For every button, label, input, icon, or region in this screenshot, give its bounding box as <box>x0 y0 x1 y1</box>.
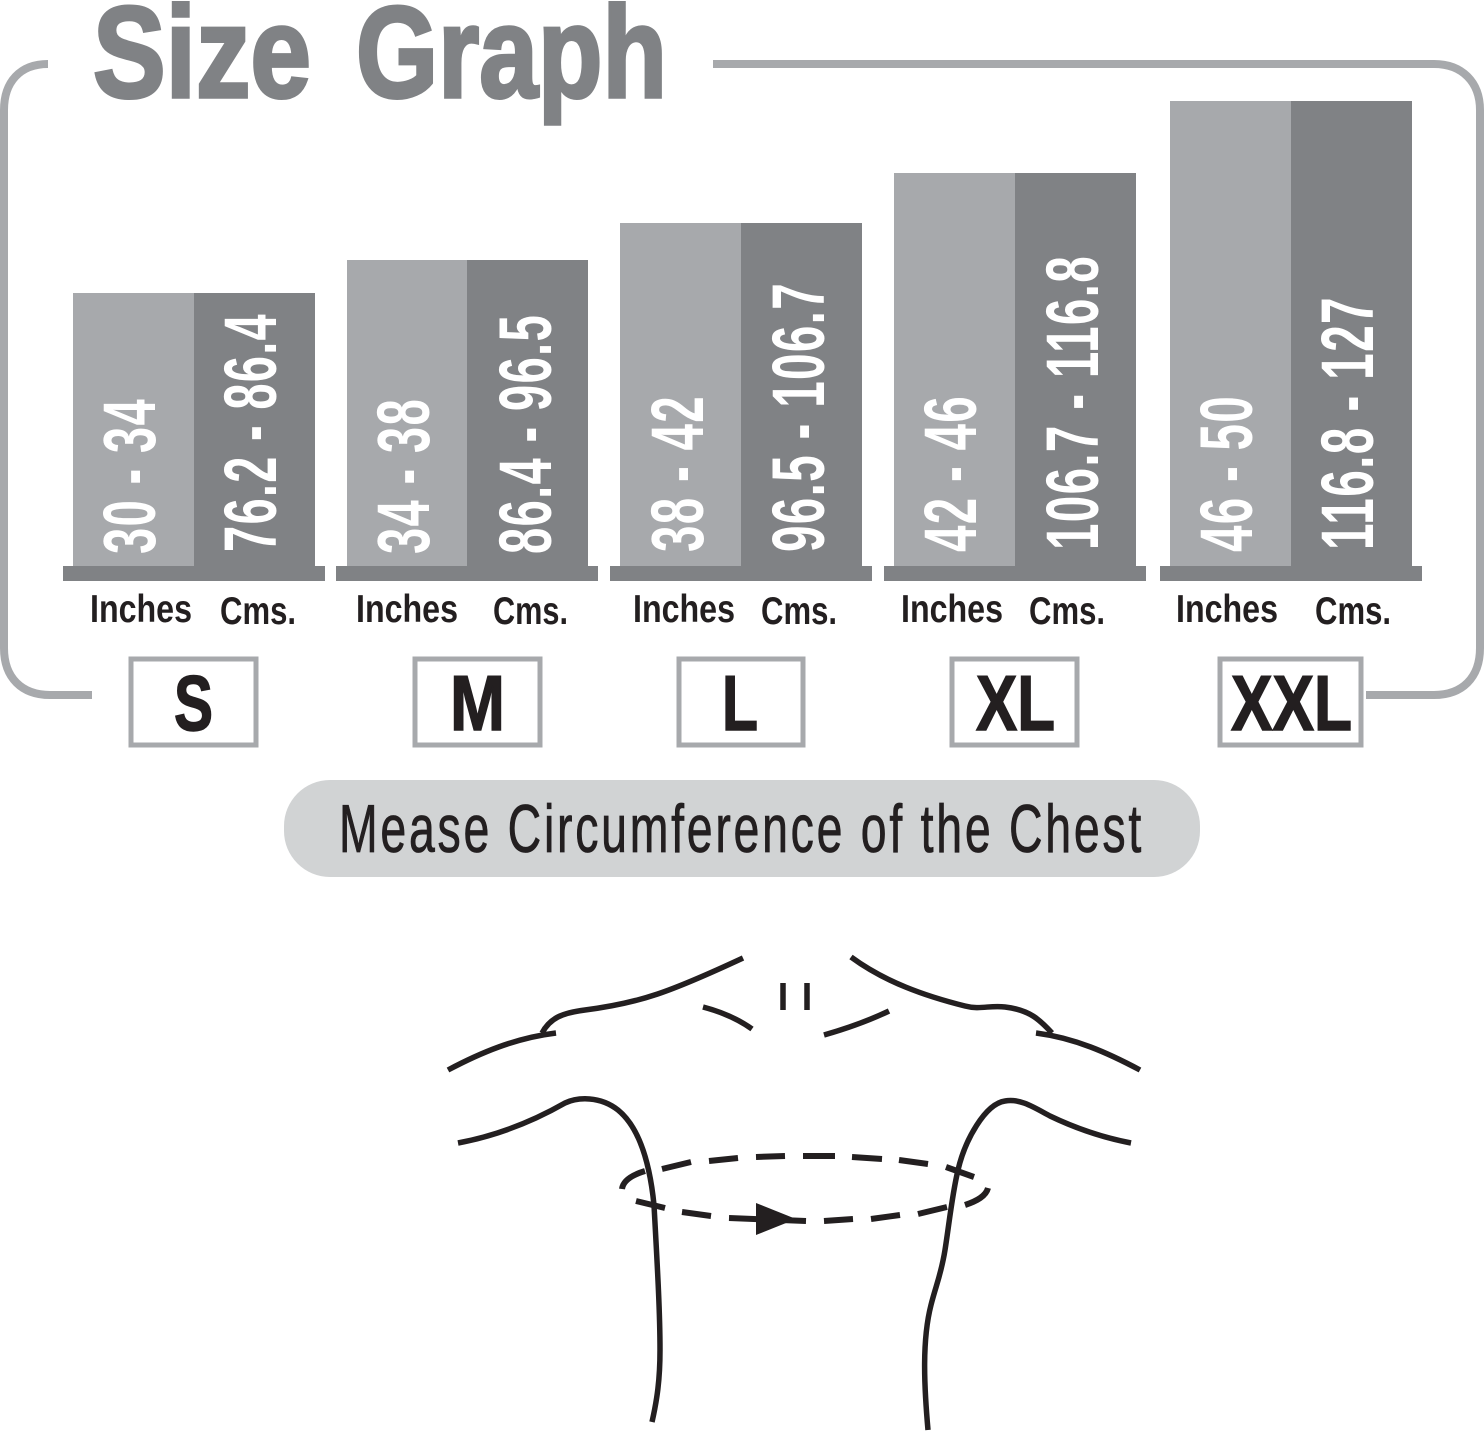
instruction pill <box>284 780 1200 877</box>
bar group: XL <box>884 173 1146 633</box>
bar group: XL: Cms. <box>1029 590 1105 633</box>
bar group: XXL: Cms. <box>1315 590 1391 633</box>
size label: XL: XL <box>976 659 1055 747</box>
rounded frame <box>4 64 1480 695</box>
dashed measuring loop <box>622 1156 988 1221</box>
bar group: S: Inches <box>90 588 192 631</box>
size label: L <box>679 659 803 747</box>
bar group: XL: 106.7 - 116.8 <box>1031 255 1114 550</box>
size label: S: S <box>174 659 213 747</box>
size label: M <box>415 659 540 747</box>
bar group: XXL: 116.8 - 127 <box>1306 296 1389 550</box>
torso illustration <box>448 957 1140 1430</box>
bar group: S <box>63 293 325 633</box>
bar group: XL: 42 - 46 <box>909 395 992 552</box>
size label: S <box>131 659 256 747</box>
bar group: XXL: Inches <box>1176 588 1278 631</box>
bar group: XXL: 46 - 50 <box>1185 395 1268 552</box>
size label: M: M <box>450 659 505 747</box>
bar group: M: 34 - 38 <box>362 398 445 554</box>
bar group: L: 96.5 - 106.7 <box>757 282 840 552</box>
bar group: L: Inches <box>633 588 735 631</box>
instruction pill: Mease Circumference of the Chest <box>339 791 1144 867</box>
size label: L: L <box>722 659 758 747</box>
bar group: M: Inches <box>356 588 458 631</box>
bar group: M <box>336 260 598 633</box>
bar group: M: 86.4 - 96.5 <box>484 314 567 554</box>
bar group: L: Cms. <box>761 590 837 633</box>
arrowhead <box>756 1203 796 1235</box>
bar group: XL: Inches <box>901 588 1003 631</box>
title <box>93 0 667 125</box>
bar group: L: 38 - 42 <box>636 395 719 552</box>
bar group: XXL <box>1160 101 1422 633</box>
bar group: M: Cms. <box>493 590 568 633</box>
size label: XXL: XXL <box>1231 659 1352 747</box>
bar group: S: Cms. <box>220 590 296 633</box>
bar group: S: 30 - 34 <box>88 398 171 554</box>
bar group: S: 76.2 - 86.4 <box>209 313 292 552</box>
bar group: L <box>610 223 872 633</box>
